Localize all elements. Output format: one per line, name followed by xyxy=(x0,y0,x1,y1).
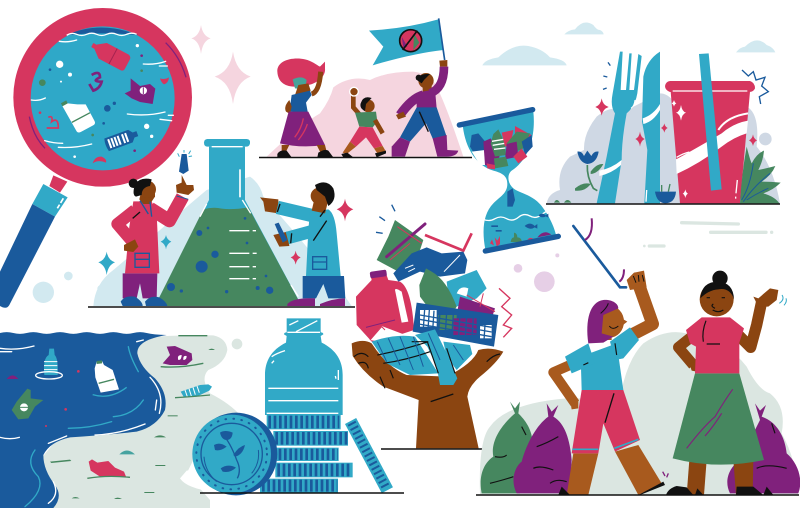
stacked caps xyxy=(260,415,353,493)
clouds xyxy=(482,22,775,65)
plastic cup with straw xyxy=(665,53,755,203)
panel: hand holding plastic trash xyxy=(352,205,559,448)
navy bottle in lens xyxy=(103,127,140,151)
trash in hourglass xyxy=(470,126,533,169)
woman with grabber xyxy=(553,218,665,495)
litter grabber xyxy=(573,218,626,287)
bottle on beach xyxy=(175,384,212,398)
ground line: cutlery xyxy=(546,203,780,205)
water xyxy=(0,332,167,508)
magnifying glass with ocean plastic xyxy=(0,8,192,308)
red jug on beach xyxy=(87,459,130,478)
white jug in lens xyxy=(61,93,96,134)
red bottle in lens xyxy=(88,37,132,72)
beach xyxy=(40,335,242,508)
trash pile xyxy=(356,220,498,347)
trash bags xyxy=(481,402,800,493)
marcher: child xyxy=(341,87,386,157)
coin xyxy=(192,413,277,495)
navy bowl sprout xyxy=(655,184,676,203)
flask xyxy=(155,139,302,306)
scientist left xyxy=(117,150,194,306)
floating bag xyxy=(12,389,43,419)
ground line: bottle and coin xyxy=(200,492,404,494)
ground line: flask xyxy=(88,306,355,308)
flower xyxy=(575,151,603,191)
hourglass with plastic and sea life xyxy=(459,110,558,251)
decorative sparkles and dots xyxy=(33,25,251,352)
panel: two women cleaning up xyxy=(480,218,800,495)
floating jug xyxy=(93,360,127,396)
blue fabric bag xyxy=(372,329,472,385)
knife xyxy=(642,52,660,203)
leaves plant xyxy=(740,147,781,203)
sparkles xyxy=(98,199,353,275)
woman waving xyxy=(666,271,786,495)
hand xyxy=(352,341,503,448)
bag on beach xyxy=(161,346,203,367)
panel: flask and scientists xyxy=(93,139,353,306)
marcher: flag bearer xyxy=(392,60,458,157)
ground line: hand xyxy=(381,448,492,450)
panel: single-use cutlery and cup xyxy=(547,52,781,203)
ground line: marchers xyxy=(259,156,472,158)
scientist right xyxy=(260,182,345,306)
marcher: woman with bundle xyxy=(277,58,333,157)
flag xyxy=(369,18,445,65)
panel: plastic bottle and coin stack xyxy=(192,318,393,495)
sparkles xyxy=(595,98,757,147)
panel: ocean and beach xyxy=(0,332,242,508)
sea life xyxy=(490,214,551,247)
leaning cap xyxy=(345,418,393,493)
ground line: cleanup xyxy=(476,494,799,496)
floating bottle xyxy=(36,349,62,379)
bottle xyxy=(265,318,343,415)
fork xyxy=(597,52,642,203)
purple bag in lens xyxy=(125,78,155,104)
panel: marchers with flag xyxy=(267,18,463,157)
